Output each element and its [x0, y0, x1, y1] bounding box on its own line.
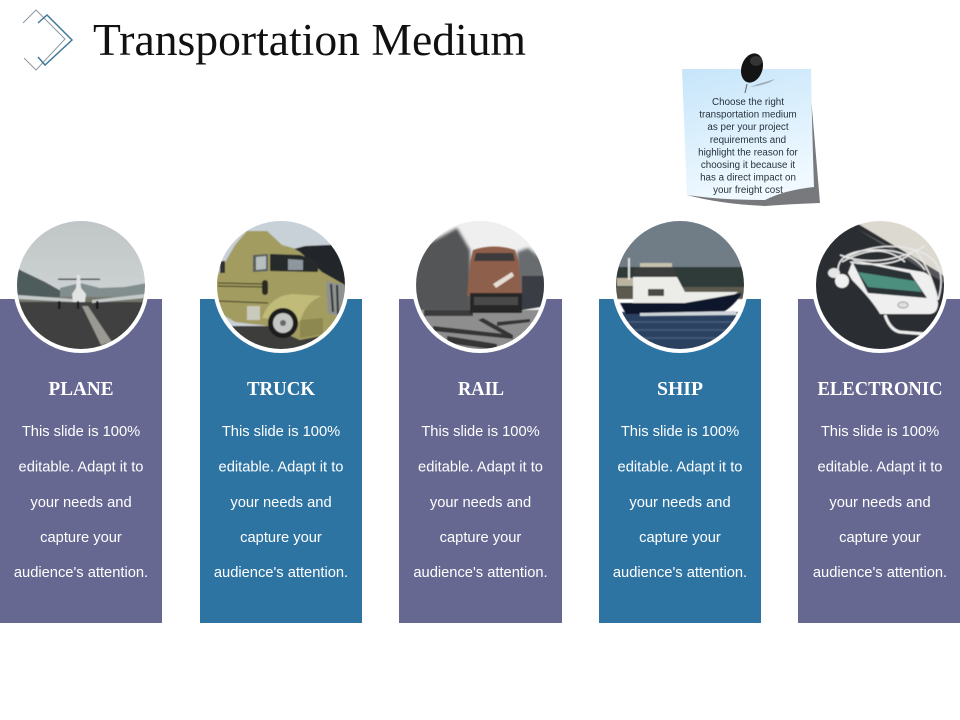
photo: plane on runway: [15, 219, 147, 352]
photo ring: [213, 217, 349, 353]
body text: your needs and: [829, 495, 931, 511]
note text: has a direct impact on: [700, 173, 796, 184]
body text: editable. Adapt it to: [418, 460, 543, 476]
note paper: [682, 69, 814, 200]
note text: as per your project: [707, 122, 789, 133]
heading: RAIL: [458, 378, 504, 400]
heading: TRUCK: [247, 378, 315, 400]
body text: editable. Adapt it to: [219, 460, 343, 476]
panel background: [399, 299, 562, 623]
body text: capture your: [440, 530, 521, 546]
photo ring: [612, 217, 748, 353]
sticky note callout: [682, 50, 820, 206]
panel: electronic: [798, 217, 960, 623]
photo: locomotive: [414, 219, 546, 352]
panel: plane: [0, 217, 162, 623]
title: Transportation Medium: [93, 15, 526, 65]
panel: ship: [599, 217, 761, 623]
heading: PLANE: [48, 378, 114, 400]
body text: your needs and: [629, 495, 731, 511]
body text: This slide is 100%: [22, 424, 140, 440]
body text: your needs and: [430, 495, 531, 511]
body text: editable. Adapt it to: [618, 460, 742, 476]
panel background: [0, 299, 162, 623]
panel background: [599, 299, 761, 623]
body text: This slide is 100%: [821, 424, 939, 440]
photo ring: [13, 217, 149, 353]
heading: SHIP: [657, 378, 703, 400]
note text: highlight the reason for: [698, 148, 799, 158]
body text: audience's attention.: [214, 565, 348, 581]
body text: audience's attention.: [14, 565, 148, 581]
photo ring: [412, 217, 548, 353]
body text: your needs and: [230, 495, 332, 511]
body text: audience's attention.: [613, 565, 747, 581]
note text: transportation medium: [699, 110, 797, 121]
body text: capture your: [40, 530, 122, 546]
photo: phone and earphones: [814, 219, 946, 353]
note text: choosing it because it: [701, 160, 795, 171]
body text: editable. Adapt it to: [818, 460, 942, 476]
note text: your freight cost: [713, 185, 783, 196]
panel: rail: [399, 217, 562, 623]
photo ring: [812, 217, 948, 353]
body text: editable. Adapt it to: [19, 460, 143, 476]
body text: capture your: [639, 530, 721, 546]
icon: push pin: [737, 50, 775, 93]
body text: capture your: [240, 530, 322, 546]
body text: This slide is 100%: [621, 424, 739, 440]
panel background: [798, 299, 960, 623]
body text: This slide is 100%: [222, 424, 340, 440]
heading: ELECTRONIC: [818, 378, 942, 400]
body text: audience's attention.: [413, 565, 548, 581]
note text: requirements and: [710, 135, 786, 146]
note shadow: [687, 85, 820, 206]
photo: truck: [215, 219, 350, 352]
body text: your needs and: [30, 495, 132, 511]
body text: This slide is 100%: [421, 424, 540, 440]
body text: capture your: [839, 530, 921, 546]
body text: audience's attention.: [813, 565, 947, 581]
icon: double chevron logo: [23, 10, 72, 70]
photo: motor yacht: [614, 219, 746, 352]
note text: Choose the right: [712, 97, 784, 108]
panel background: [200, 299, 362, 623]
panel: truck: [200, 217, 362, 623]
